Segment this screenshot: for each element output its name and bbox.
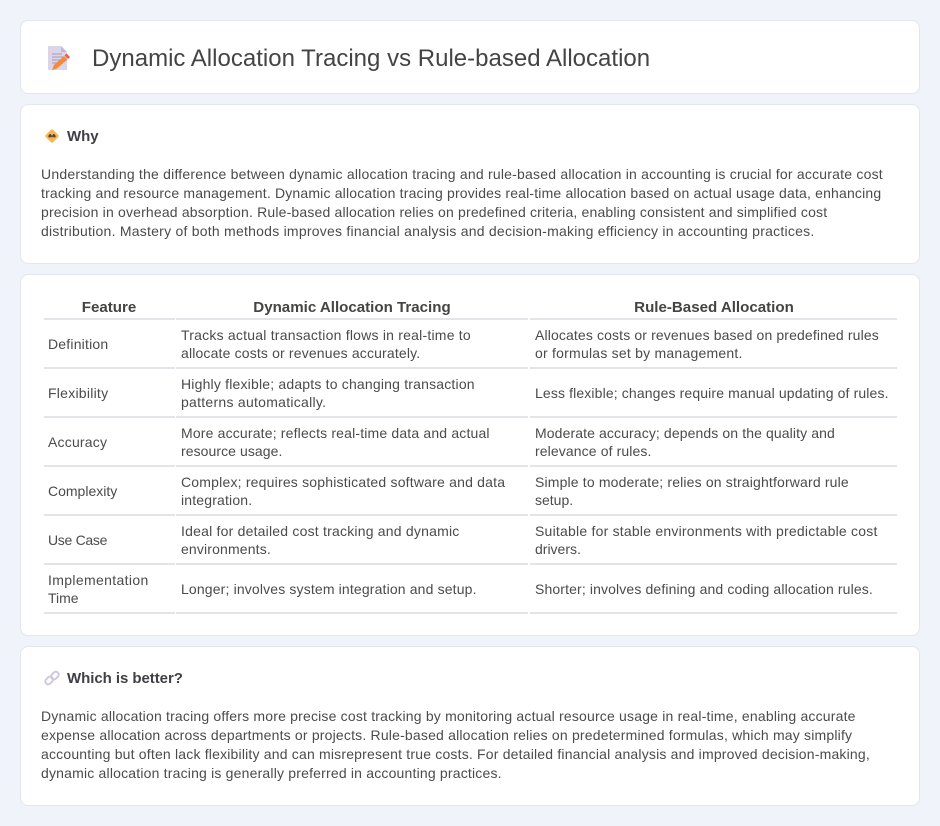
row: implementation time: Longer; involves system integration and setup.	[181, 581, 477, 597]
text block: why paragraph: distribution. Mastery of both methods improves financial analysis and decision-making efficiency in accounting practices.	[41, 223, 814, 239]
table header: Rule-Based Allocation	[634, 299, 794, 316]
text block: why paragraph: Understanding the difference between dynamic allocation tracing and rule-based allocation in accounting is crucial for accurate cost	[41, 166, 883, 182]
panel: title	[20, 20, 920, 94]
table header	[82, 299, 794, 316]
row: use case: Suitable for stable environments with predictable cost	[535, 523, 878, 539]
row: use case	[48, 523, 878, 557]
row: implementation time: Implementation	[48, 572, 149, 588]
row: accuracy: Accuracy	[48, 434, 107, 450]
row: accuracy: resource usage.	[181, 443, 282, 459]
row: complexity: Complex; requires sophisticated software and data	[181, 474, 505, 490]
icon: warning diamond	[45, 129, 59, 143]
row: complexity: Simple to moderate; relies on straightforward rule	[535, 474, 849, 490]
text block: which is better paragraph: expense allocation across departments or projects. Rule-based allocation relies on predetermined formulas, which may simplify	[41, 727, 852, 743]
row: use case: Ideal for detailed cost tracking and dynamic	[181, 523, 460, 539]
row: complexity	[48, 474, 849, 508]
row: implementation time: Time	[48, 590, 79, 606]
table header: Feature	[82, 299, 136, 316]
text block: why paragraph: precision in overhead absorption. Rule-based allocation relies on predefined criteria, enabling consistent and simplified cost	[41, 204, 827, 220]
icon: document with pencil	[48, 46, 70, 70]
row: accuracy: More accurate; reflects real-time data and actual	[181, 425, 490, 441]
text block: which is better paragraph: accounting but often lack flexibility and can misrepresent true costs. For detailed financial analysis and improved decision-making,	[41, 746, 870, 762]
row: implementation time: Shorter; involves defining and coding allocation rules.	[535, 581, 873, 597]
row: complexity: setup.	[535, 492, 573, 508]
panel: comparison table	[20, 274, 920, 636]
heading: which is better: Which is better?	[67, 670, 183, 687]
row: flexibility: Flexibility	[48, 385, 108, 401]
row: complexity: Complexity	[48, 483, 117, 499]
row: flexibility: Highly flexible; adapts to changing transaction	[181, 376, 475, 392]
row: use case: environments.	[181, 541, 271, 557]
row: definition: allocate costs or revenues accurately.	[181, 345, 420, 361]
table header: Dynamic Allocation Tracing	[253, 299, 451, 316]
heading: why: Why	[67, 128, 99, 145]
row: flexibility: Less flexible; changes require manual updating of rules.	[535, 385, 889, 401]
panel: why	[20, 104, 920, 264]
heading: page title: Dynamic Allocation Tracing vs Rule-based Allocation	[92, 45, 650, 72]
row: accuracy	[48, 425, 835, 459]
row: complexity: integration.	[181, 492, 252, 508]
row: flexibility	[48, 376, 889, 410]
panel: which is better	[20, 646, 920, 806]
text block: which is better paragraph: Dynamic allocation tracing offers more precise cost tracking by monitoring actual resource usage in real-time, enabling accurate	[41, 708, 856, 724]
text block: which is better paragraph: dynamic allocation tracing is generally preferred in accounting practices.	[41, 765, 502, 781]
row: use case: drivers.	[535, 541, 581, 557]
text block: why paragraph	[41, 166, 883, 239]
text block: why paragraph: tracking and resource management. Dynamic allocation tracing provides real-time allocation based on actual usage data, enhancing	[41, 185, 881, 201]
row: use case: Use Case	[48, 532, 107, 548]
row: accuracy: relevance of rules.	[535, 443, 651, 459]
row: flexibility: patterns automatically.	[181, 394, 326, 410]
row: definition: Allocates costs or revenues based on predefined rules	[535, 327, 879, 343]
row: definition	[48, 327, 879, 361]
row: definition: Definition	[48, 336, 108, 352]
icon: chain link	[44, 670, 60, 686]
row: implementation time	[48, 572, 873, 606]
text block: which is better paragraph	[41, 708, 870, 781]
row: definition: Tracks actual transaction flows in real-time to	[181, 327, 471, 343]
row: accuracy: Moderate accuracy; depends on the quality and	[535, 425, 835, 441]
row: definition: or formulas set by management.	[535, 345, 743, 361]
